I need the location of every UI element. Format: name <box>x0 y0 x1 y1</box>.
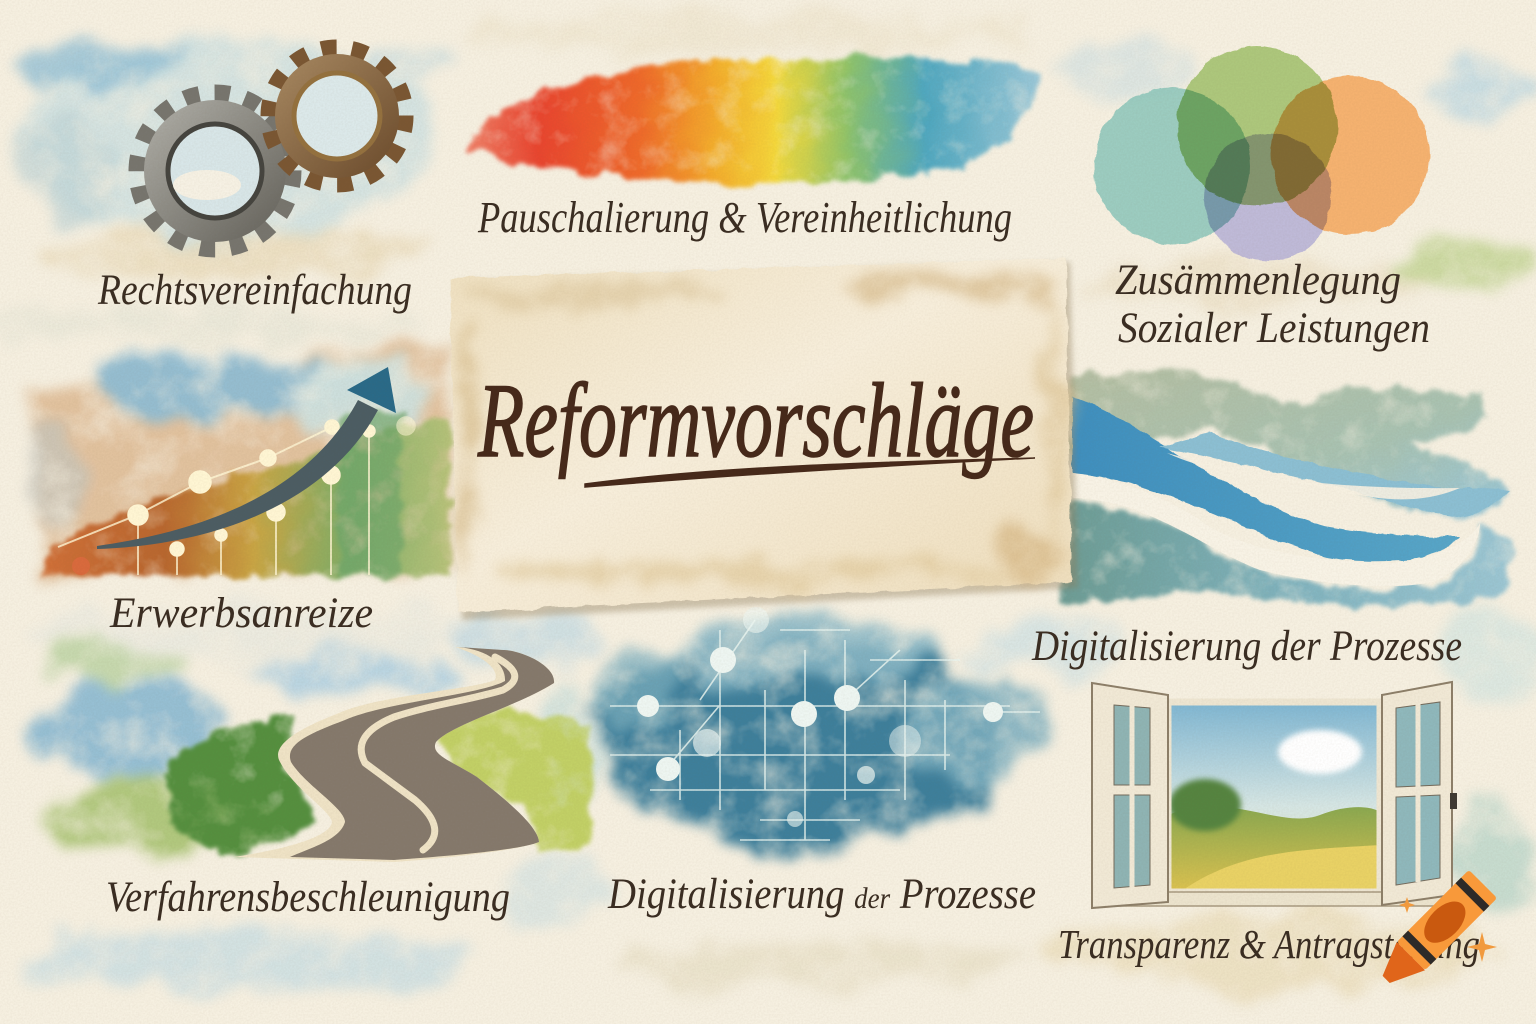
wave: blue stripe <box>1073 397 1510 561</box>
label: Digitalisierung der Prozesse: Digitalisierung der Prozesse <box>1031 623 1462 670</box>
icon: bronze gear <box>269 48 405 184</box>
label: Zusammenlegung: Zusämmenlegung <box>1115 257 1401 304</box>
label: Pauschalierung & Vereinheitlichung: Pauschalierung & Vereinheitlichung <box>477 193 1012 242</box>
icon: right shutter <box>1382 682 1457 905</box>
wash: color ground <box>42 415 450 576</box>
network nodes <box>637 607 1003 827</box>
icon: window frame <box>1168 702 1380 892</box>
label: Digitalisierung der Prozesse: Digitalisierung der Prozesse <box>607 871 1036 918</box>
panel: Erwerbsanreize <box>29 345 450 637</box>
wash: yellow-green verge <box>434 711 590 850</box>
panel: Rechtsvereinfachung <box>97 48 412 314</box>
wash: olive upper band <box>1070 372 1507 517</box>
label: Sozialer Leistungen: Sozialer Leistungen <box>1118 305 1430 352</box>
wash: sky and ochre background <box>29 345 450 570</box>
wash: green bush <box>165 719 320 855</box>
title underline <box>585 458 1035 487</box>
network lines <box>610 620 1040 840</box>
parchment stains <box>461 268 1064 589</box>
title: Reformvorschläge: Reformvorschläge <box>477 362 1034 479</box>
panel: Pauschalierung & Vereinheitlichung <box>470 56 1040 242</box>
icon: landscape through window <box>1168 702 1380 892</box>
wash: teal lower band <box>1060 500 1510 607</box>
wave: white crest <box>1073 473 1480 586</box>
label: Erwerbsanreize: Erwerbsanreize <box>109 590 373 637</box>
icon: overlapping circles <box>1094 46 1429 261</box>
wash: landscape <box>35 645 598 853</box>
panel: central parchment <box>450 258 1078 620</box>
panel: Verfahrensbeschleunigung <box>35 645 598 921</box>
panel: Transparenz & Antragstellung <box>1058 682 1480 967</box>
panel: Zusammenlegung Sozialer Leistungen <box>1094 46 1430 352</box>
parchment shadow <box>456 262 1078 620</box>
panel: Digitalisierung der Prozesse network <box>595 607 1050 918</box>
icon: sparkles <box>1399 897 1497 962</box>
label: Rechtsvereinfachung: Rechtsvereinfachung <box>97 267 412 314</box>
wave: pale swath <box>1167 453 1460 499</box>
wash: rainbow stroke <box>470 56 1040 183</box>
label: Verfahrensbeschleunigung: Verfahrensbeschleunigung <box>106 874 510 921</box>
wash: blue teal cloud <box>595 612 1050 845</box>
road: winding road <box>234 647 554 862</box>
chart: light stems and dots <box>58 417 415 575</box>
icon: sill <box>1095 892 1460 906</box>
parchment sheet <box>450 258 1072 612</box>
icon: orange crayon <box>1373 870 1497 994</box>
panel: Digitalisierung der Prozesse wave <box>1031 372 1510 670</box>
icon: steel gear <box>138 94 292 248</box>
arrow: rising trend <box>97 367 396 549</box>
icon: left shutter <box>1092 683 1168 908</box>
